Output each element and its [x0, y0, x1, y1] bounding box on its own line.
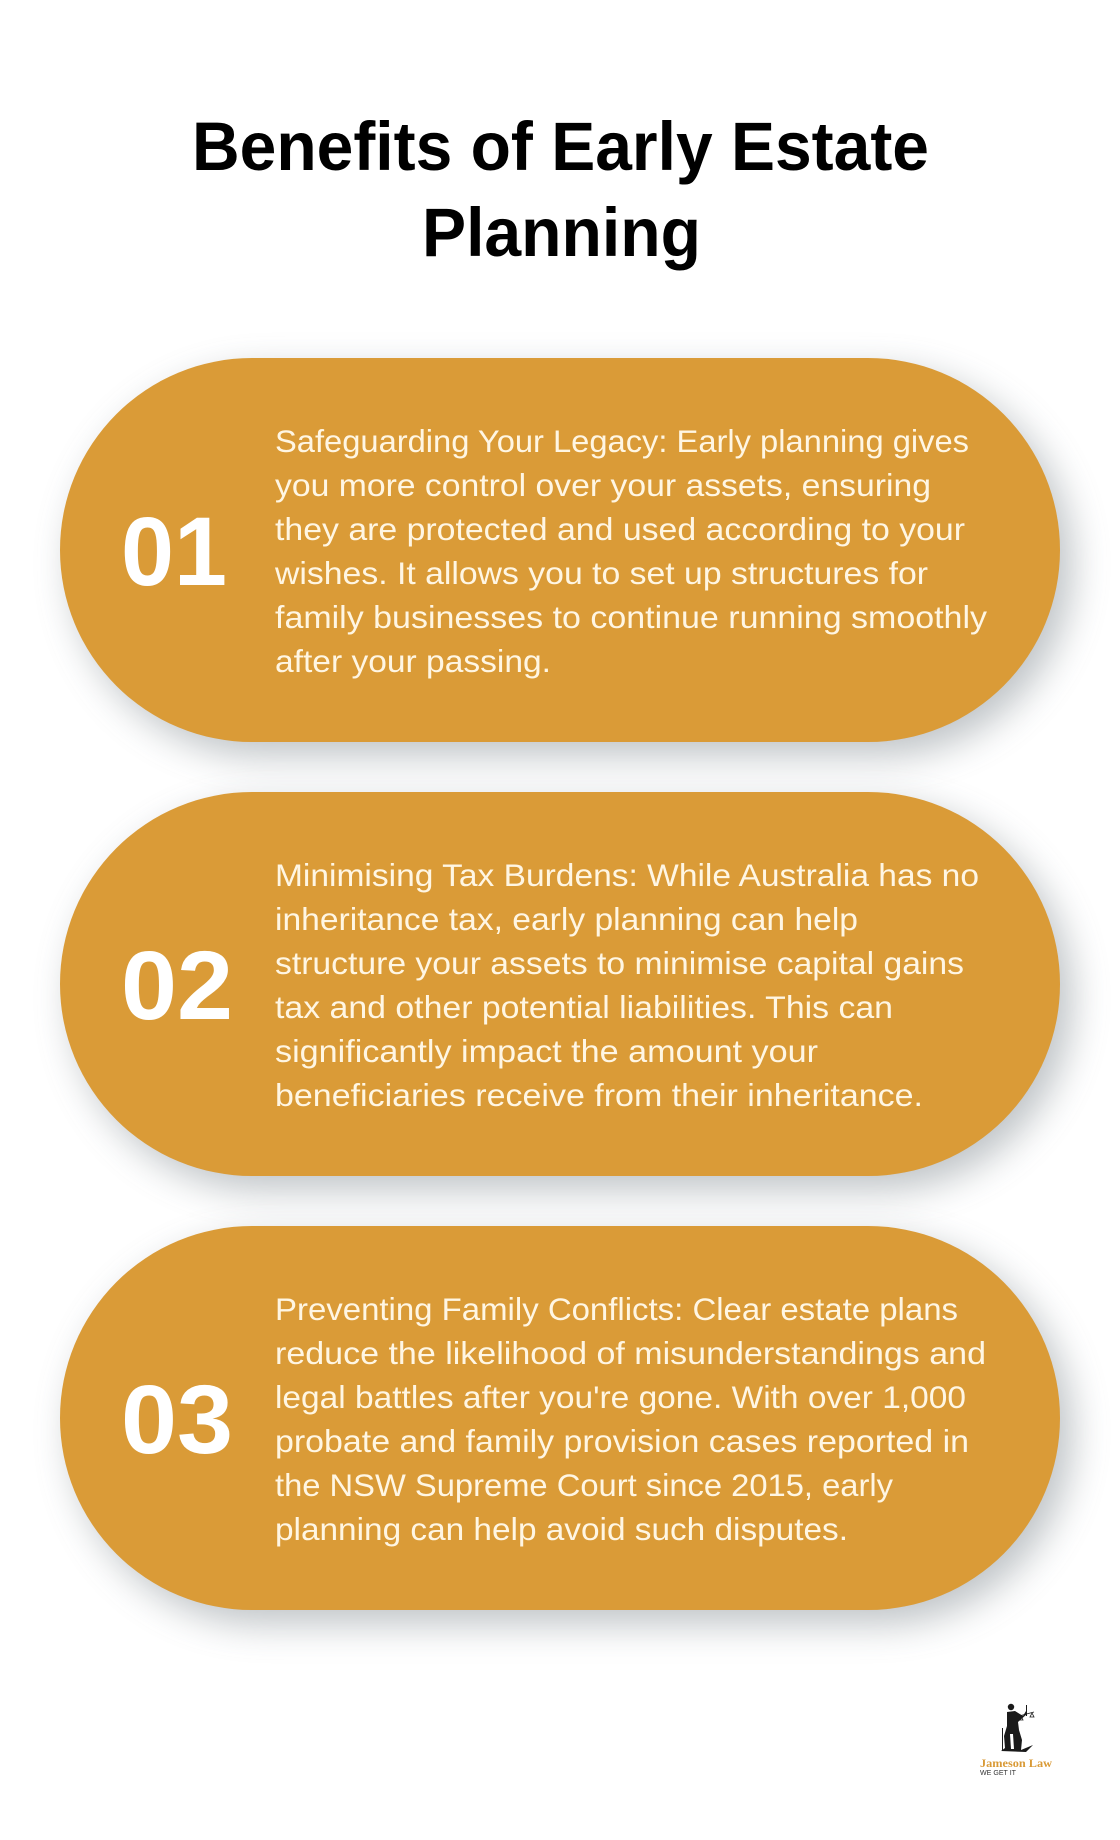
text block: safeguarding your legacy [274, 423, 987, 679]
text block: minimising tax burdens: inheritance tax, early planning can help [275, 901, 858, 937]
text block: minimising tax burdens: Minimising Tax Burdens: While Australia has no [275, 857, 979, 893]
text block: minimising tax burdens: tax and other potential liabilities. This can [275, 989, 893, 1025]
text block: safeguarding your legacy: Safeguarding Your Legacy: Early planning gives [275, 423, 969, 459]
number 02: 02 [121, 931, 233, 1040]
title: Planning [422, 194, 701, 271]
text block: minimising tax burdens [275, 857, 979, 1113]
text block: preventing family conflicts: Preventing Family Conflicts: Clear estate plans [275, 1291, 958, 1327]
text block: minimising tax burdens: significantly impact the amount your [275, 1033, 818, 1069]
text block: preventing family conflicts: the NSW Supreme Court since 2015, early [275, 1467, 893, 1503]
panel: safeguarding your legacy [60, 358, 1072, 756]
text block: safeguarding your legacy: wishes. It allows you to set up structures for [274, 555, 928, 591]
logo tagline: WE GET IT [980, 1770, 1017, 1777]
logo name: Jameson Law [980, 1756, 1052, 1770]
icon: lady justice [1001, 1704, 1034, 1752]
text block: preventing family conflicts: probate and family provision cases reported in [275, 1423, 969, 1459]
text block: preventing family conflicts [275, 1291, 986, 1547]
panel: minimising tax burdens [60, 792, 1072, 1190]
text block: safeguarding your legacy: they are protected and used according to your [275, 511, 965, 547]
text block: safeguarding your legacy: after your passing. [275, 643, 551, 679]
title: Benefits of Early Estate [192, 108, 929, 185]
text block: safeguarding your legacy: you more control over your assets, ensuring [275, 467, 931, 503]
panel: preventing family conflicts [60, 1226, 1072, 1624]
text block: preventing family conflicts: planning can help avoid such disputes. [275, 1511, 848, 1547]
number 01: 01 [121, 497, 227, 606]
number 03: 03 [121, 1365, 233, 1474]
text block: minimising tax burdens: beneficiaries receive from their inheritance. [275, 1077, 923, 1113]
logo: Jameson Law [980, 1704, 1052, 1777]
title [192, 108, 929, 271]
text block: preventing family conflicts: reduce the likelihood of misunderstandings and [275, 1335, 986, 1371]
text block: minimising tax burdens: structure your assets to minimise capital gains [275, 945, 964, 981]
text block: preventing family conflicts: legal battles after you're gone. With over 1,000 [275, 1379, 966, 1415]
text block: safeguarding your legacy: family businesses to continue running smoothly [275, 599, 987, 635]
